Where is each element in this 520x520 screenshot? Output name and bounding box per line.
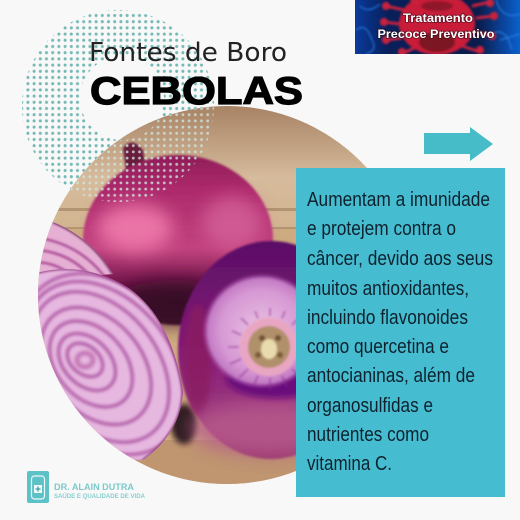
panel: description text: incluindo flavonoides <box>307 307 468 329</box>
back onion slice <box>38 222 113 278</box>
icon: medical phone <box>27 471 49 503</box>
logo: Dr. Alain Dutra: SAÚDE E QUALIDADE DE VIDA <box>54 491 145 500</box>
title: Fontes de Boro: Fontes de Boro <box>89 38 287 68</box>
panel: description text: nutrientes como <box>307 424 429 446</box>
front onion slice with rings <box>38 269 183 460</box>
panel: description text: antocianinas, além de <box>307 365 475 387</box>
blue network lines <box>356 0 520 54</box>
logo: Dr. Alain Dutra: DR. ALAIN DUTRA <box>54 482 134 493</box>
photo: red onions in a circle <box>38 106 367 484</box>
banner text: Precoce Preventivo <box>378 27 494 41</box>
panel: description text: e protejem contra o <box>307 218 456 240</box>
panel: description text: organosulfidas e <box>307 395 433 417</box>
top onion <box>83 142 273 325</box>
panel: description text <box>296 168 505 497</box>
logo: Dr. Alain Dutra <box>27 471 145 503</box>
dotted halftone circle <box>22 10 214 190</box>
shadow below onions <box>171 404 197 444</box>
arrow <box>424 127 493 161</box>
panel: description text: vitamina C. <box>307 453 392 475</box>
banner text <box>378 12 495 39</box>
dark band under flower <box>224 374 296 401</box>
onion root centre <box>240 318 298 376</box>
halftone over photo <box>70 106 214 202</box>
pale petals <box>202 274 296 388</box>
panel: description text: Aumentam a imunidade <box>307 189 490 211</box>
red virus <box>381 0 497 55</box>
title: CEBOLAS: CEBOLAS <box>90 70 303 113</box>
panel: description text: como quercetina e <box>307 336 449 358</box>
banner: Tratamento Precoce Preventivo <box>355 0 520 55</box>
banner text: Tratamento <box>403 11 473 25</box>
panel: description text: câncer, devido aos seus <box>307 248 493 270</box>
panel: description text: muitos antioxidantes, <box>307 278 469 300</box>
petal rays <box>228 307 296 386</box>
right onion <box>176 240 296 463</box>
